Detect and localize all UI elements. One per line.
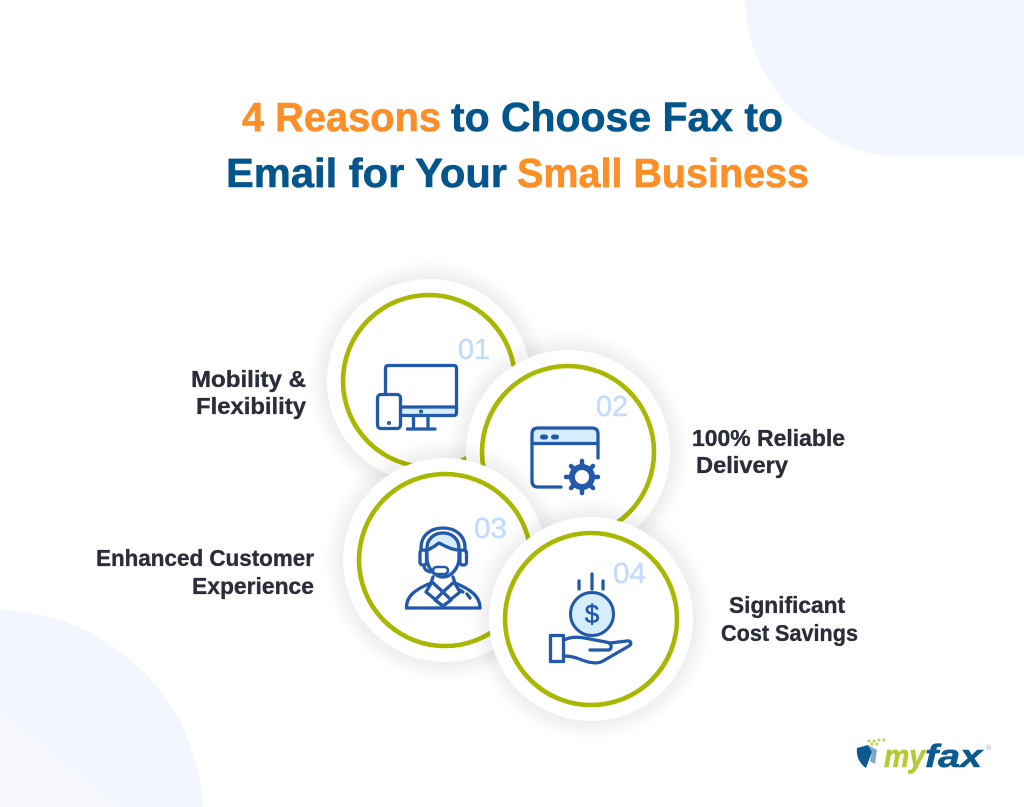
logo: myfax: fax bbox=[925, 738, 983, 774]
label: Enhanced Customer Experience: Enhanced Customer bbox=[96, 545, 314, 571]
title: Email for Your bbox=[226, 150, 507, 196]
label: 100% Reliable Delivery: Delivery bbox=[696, 452, 788, 478]
label: Mobility & Flexibility: Flexibility bbox=[196, 393, 306, 419]
label: Significant Cost Savings bbox=[721, 592, 858, 646]
title bbox=[226, 94, 809, 196]
circle 04 bbox=[469, 497, 713, 741]
label: Mobility & Flexibility: Mobility & bbox=[191, 366, 306, 392]
title: Small Business bbox=[517, 150, 809, 196]
number 01: 01 bbox=[458, 334, 490, 366]
label: 100% Reliable Delivery: 100% Reliable bbox=[692, 425, 845, 451]
number 04: 04 bbox=[613, 558, 646, 590]
icon: browser window with gear bbox=[532, 428, 598, 493]
circle 02 bbox=[446, 330, 690, 574]
circle 01 bbox=[307, 259, 551, 503]
number 03: 03 bbox=[474, 513, 507, 545]
label: Significant Cost Savings: Significant bbox=[729, 592, 845, 618]
logo: myfax: my bbox=[884, 738, 927, 774]
label: Enhanced Customer Experience: Experience bbox=[192, 573, 314, 599]
icon: support agent with headset bbox=[406, 528, 480, 608]
background shape: top right bbox=[745, 0, 1024, 157]
icon: hand holding dollar coin bbox=[550, 574, 631, 663]
background shape: bottom left bbox=[0, 610, 203, 807]
title: to Choose Fax to bbox=[451, 94, 783, 140]
label: 100% Reliable Delivery bbox=[692, 425, 845, 478]
number 02: 02 bbox=[596, 391, 628, 423]
icon: logo mark bbox=[857, 738, 886, 768]
icon: hand holding dollar coin: $ bbox=[585, 599, 600, 629]
circle 03 bbox=[323, 438, 567, 682]
logo: myfax: ® bbox=[986, 744, 992, 752]
title: 4 Reasons bbox=[242, 94, 441, 140]
label: Significant Cost Savings: Cost Savings bbox=[721, 620, 858, 646]
logo: myfax bbox=[857, 738, 992, 774]
icon: monitor and phone bbox=[378, 366, 457, 429]
label: Mobility & Flexibility bbox=[191, 366, 306, 419]
label: Enhanced Customer Experience bbox=[96, 545, 314, 599]
